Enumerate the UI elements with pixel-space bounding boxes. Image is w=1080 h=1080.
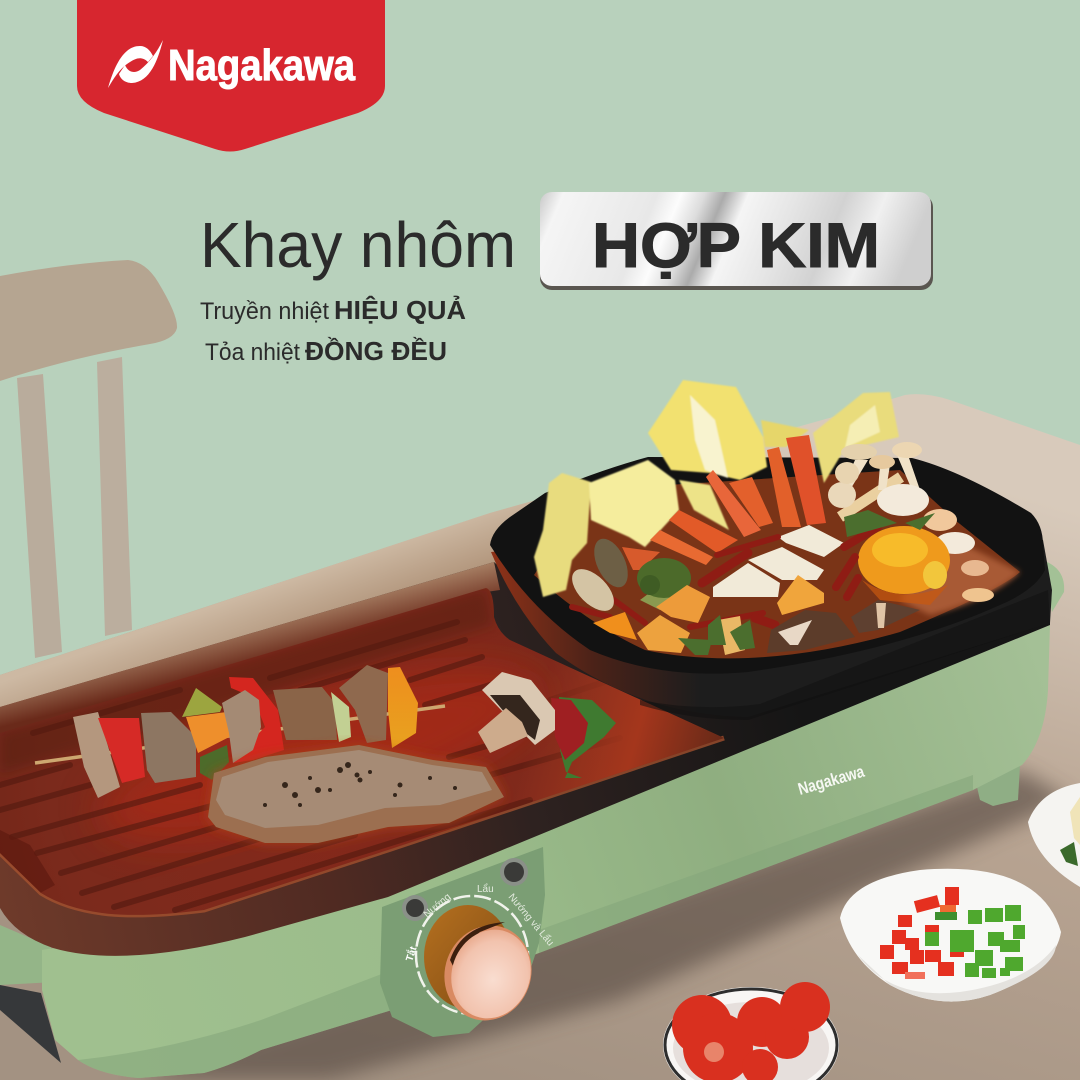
badge: HỢP KIM <box>540 192 933 290</box>
plate bottom-left pad <box>0 830 55 893</box>
food: mushrooms and fishballs <box>828 442 994 602</box>
logo tag <box>77 0 385 152</box>
bowl: small right edge <box>1028 783 1080 887</box>
food: shiitake <box>767 600 920 653</box>
grill rim <box>0 562 1050 956</box>
plate right fade <box>526 667 724 800</box>
meat 3 <box>222 690 261 763</box>
skewer <box>35 665 445 798</box>
badge: HỢP KIM: HỢP KIM <box>592 211 880 281</box>
meat 2 <box>141 712 196 783</box>
left handle <box>0 925 55 985</box>
food: mussels <box>565 534 635 618</box>
orange pepper 2 <box>388 667 418 748</box>
text: Truyền nhiệt HIỆU QUẢ: Truyền nhiệt <box>200 298 329 325</box>
food: crab sticks <box>622 435 826 570</box>
pot wall <box>491 520 1052 717</box>
table top <box>0 394 1080 1080</box>
dial labels: Nướng và Lẩu <box>506 891 556 948</box>
bowl: pepper salad <box>840 869 1061 1002</box>
orange pepper 1 <box>186 712 239 753</box>
right handle <box>1042 560 1064 612</box>
chair <box>0 260 177 658</box>
mushroom <box>478 672 555 753</box>
meat 4 <box>273 687 337 740</box>
plate inner edge <box>0 738 724 915</box>
dial scale <box>416 896 528 1014</box>
dial labels: Lẩu <box>477 883 494 895</box>
heading: Khay nhôm: Khay nhôm <box>200 209 516 281</box>
text: Tỏa nhiệt ĐỒNG ĐỀU <box>205 336 447 366</box>
top shade <box>0 588 494 775</box>
dial labels <box>402 883 556 963</box>
broth right <box>900 535 1020 615</box>
food: herbs <box>678 510 935 655</box>
grill body <box>42 625 1050 1078</box>
food: pale discs <box>713 525 844 597</box>
dial labels: Tắt <box>402 944 420 963</box>
text: Tỏa nhiệt ĐỒNG ĐỀU: ĐỒNG ĐỀU <box>305 336 447 366</box>
shadow under grill <box>130 770 1070 1080</box>
food: broccoli <box>637 558 691 610</box>
food: fried tofu <box>593 575 824 655</box>
text: Truyền nhiệt HIỆU QUẢ <box>200 295 466 325</box>
knob <box>424 905 512 1009</box>
grill rim top <box>0 562 500 738</box>
red pepper 1 <box>98 718 145 783</box>
text: Truyền nhiệt HIỆU QUẢ: HIỆU QUẢ <box>334 295 466 325</box>
bowl: tomatoes <box>663 982 839 1080</box>
pot band <box>640 590 1050 720</box>
food: chili <box>572 527 878 627</box>
chili pair <box>551 697 616 778</box>
meat 1 <box>73 712 120 798</box>
right foot <box>977 765 1020 806</box>
body lower strip <box>78 775 973 1078</box>
text: Tỏa nhiệt ĐỒNG ĐỀU: Tỏa nhiệt <box>205 339 300 366</box>
red pepper 2 <box>229 677 284 763</box>
logo wordmark: Nagakawa <box>168 41 355 90</box>
grill ridges <box>0 622 640 910</box>
logo mark <box>108 40 163 88</box>
food: corn <box>858 526 950 605</box>
control panel <box>380 847 556 1037</box>
dial labels: Nướng <box>422 892 453 920</box>
steak <box>208 745 504 843</box>
food: cabbage <box>534 380 899 597</box>
pot top <box>490 457 1045 674</box>
grill plate <box>0 588 724 915</box>
green pepper bottom <box>200 745 229 780</box>
wood highlight behind plate <box>0 482 600 710</box>
green pepper top <box>182 688 222 717</box>
brand on body: Nagakawa <box>796 762 867 799</box>
heat glow <box>92 658 546 853</box>
left hinge <box>0 985 61 1063</box>
indicator lights <box>402 858 528 921</box>
onion <box>331 692 351 742</box>
pot broth <box>534 470 1020 658</box>
meat 5 <box>339 665 388 743</box>
